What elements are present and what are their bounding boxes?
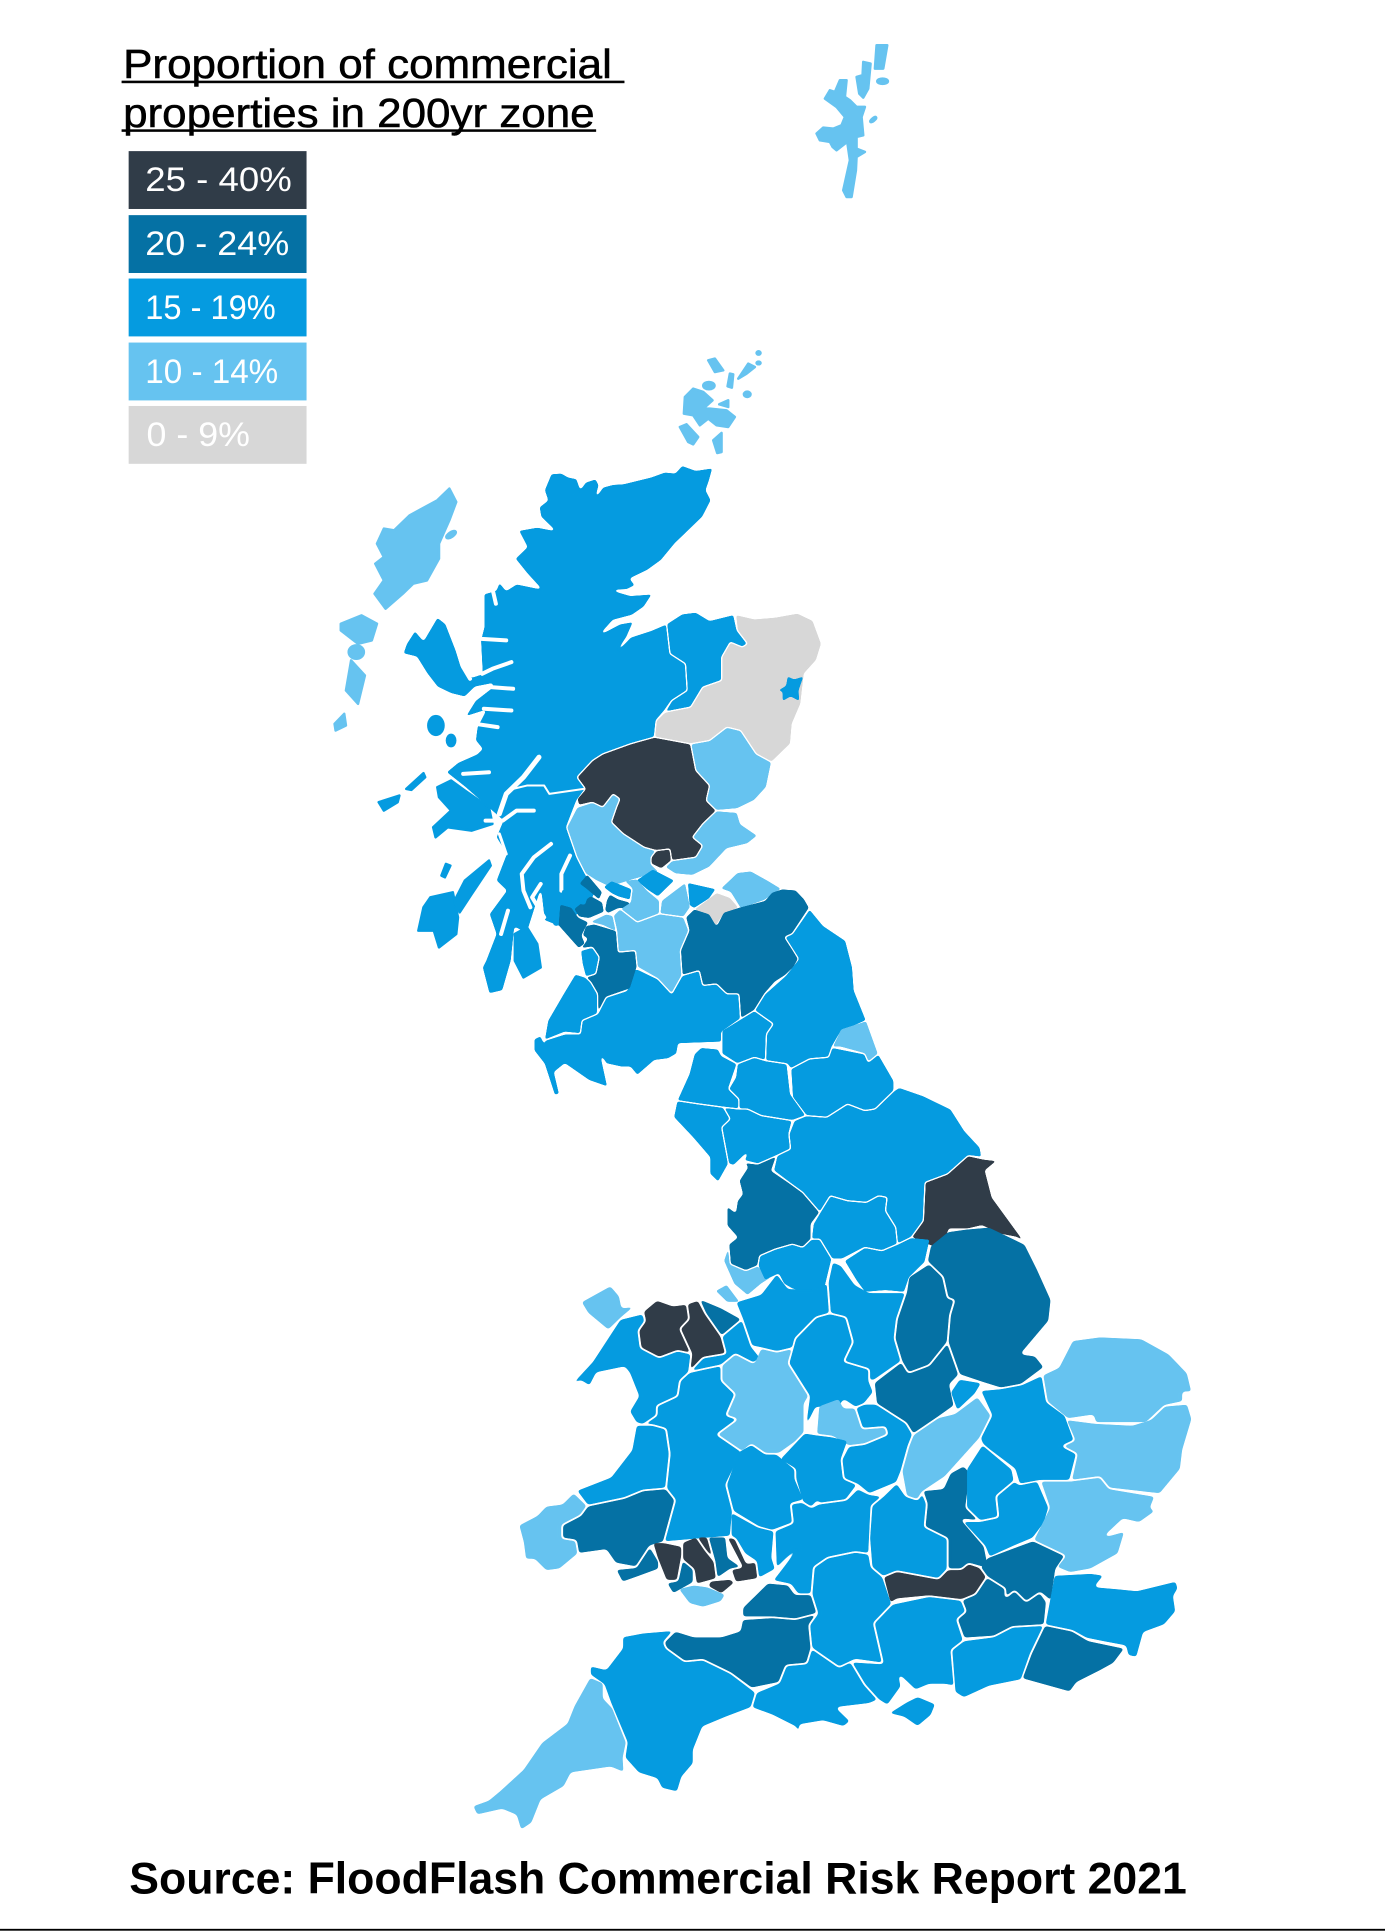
West Lothian	[660, 882, 691, 917]
West Yorkshire	[811, 1196, 897, 1259]
Conwy	[638, 1300, 691, 1358]
Wirral	[715, 1284, 741, 1302]
Angus	[691, 727, 772, 811]
Merseyside	[723, 1246, 772, 1296]
legend item: 10 - 14%	[129, 343, 307, 400]
Greater London	[980, 1540, 1065, 1602]
Suffolk	[1062, 1404, 1192, 1494]
West Dunbartonshire	[579, 874, 603, 900]
Renfrewshire	[573, 895, 604, 919]
Tyne and Wear	[832, 1021, 879, 1062]
Clackmannanshire	[651, 849, 672, 869]
Rhondda Cynon Taf	[682, 1537, 717, 1585]
Bristol and North Somerset	[742, 1583, 817, 1619]
Tynedale	[722, 1011, 773, 1064]
sea lochs	[463, 589, 584, 934]
Monmouthshire	[731, 1511, 776, 1579]
Midlothian	[694, 892, 739, 926]
Pembrokeshire	[518, 1492, 588, 1571]
County Durham	[791, 1047, 894, 1117]
Nottinghamshire	[895, 1263, 955, 1373]
Allerdale	[677, 1047, 739, 1109]
Derbyshire	[828, 1261, 906, 1381]
Isle of Wight	[888, 1696, 936, 1727]
Oxfordshire	[869, 1483, 948, 1579]
legend item: 0 - 9%	[129, 406, 307, 464]
Perth and Kinross	[577, 737, 717, 861]
Dorset	[751, 1648, 878, 1737]
Kent	[1045, 1573, 1178, 1658]
Bedfordshire	[966, 1444, 1015, 1521]
Newport	[726, 1537, 758, 1583]
East Ayrshire	[580, 924, 637, 1014]
Inverclyde	[561, 889, 589, 905]
Ceredigion	[576, 1425, 670, 1506]
Herefordshire	[726, 1444, 805, 1531]
Northamptonshire	[901, 1396, 992, 1500]
Falkirk	[635, 869, 675, 897]
Warwickshire	[841, 1404, 913, 1494]
choropleth map of Great Britain	[335, 45, 1192, 1831]
South Yorkshire	[844, 1237, 930, 1292]
South Lakeland	[722, 1107, 792, 1166]
Wrexham	[689, 1319, 761, 1372]
Rutland	[950, 1379, 982, 1411]
West Sussex	[951, 1625, 1045, 1698]
legend item: 15 - 19%: 15 - 19%	[145, 289, 276, 327]
Berkshire	[883, 1563, 987, 1604]
legend item: 25 - 40%	[129, 151, 307, 209]
East Lothian	[720, 871, 782, 909]
Aberdeen City	[777, 675, 804, 702]
Merthyr Tydfil	[696, 1537, 715, 1562]
legend item: 15 - 19%	[129, 279, 307, 336]
Outer Hebrides	[335, 489, 457, 730]
Shropshire	[717, 1348, 809, 1454]
Southern Scotland and Northern England	[534, 869, 1025, 1302]
legend item: 20 - 24%: 20 - 24%	[145, 225, 289, 263]
Denbighshire	[680, 1300, 726, 1372]
East Sussex	[1022, 1625, 1125, 1692]
Highland and Argyll region	[403, 465, 713, 994]
Worcestershire	[779, 1433, 858, 1508]
Lancashire	[727, 1156, 820, 1271]
Hertfordshire	[961, 1481, 1049, 1558]
Vale of Glamorgan	[678, 1585, 726, 1608]
Norfolk	[1042, 1336, 1192, 1423]
Wiltshire	[809, 1552, 892, 1667]
legend	[129, 151, 307, 464]
East Riding of Yorkshire	[911, 1156, 1025, 1249]
legend title: Proportion of commercial	[123, 41, 612, 87]
East Dunbartonshire	[603, 880, 632, 900]
Cornwall	[472, 1677, 627, 1831]
Powys	[643, 1365, 742, 1542]
Scottish Borders	[680, 889, 810, 1019]
Cambridgeshire	[980, 1375, 1077, 1485]
Aberdeenshire	[654, 613, 822, 762]
Northumberland	[754, 909, 866, 1069]
Greater Manchester	[758, 1239, 832, 1294]
Buckinghamshire	[922, 1465, 989, 1569]
Edinburgh	[687, 882, 717, 909]
South Ayrshire	[544, 974, 598, 1041]
Gloucestershire	[772, 1488, 883, 1594]
Hampshire	[851, 1596, 966, 1706]
Cheshire	[735, 1273, 830, 1352]
Anglesey	[581, 1285, 636, 1331]
Somerset	[664, 1613, 817, 1688]
Neath Port Talbot	[652, 1542, 682, 1581]
South Lanarkshire	[613, 909, 689, 994]
legend item: 20 - 24%	[129, 215, 307, 273]
Devon	[590, 1630, 756, 1792]
North Lanarkshire	[620, 879, 660, 922]
Lincolnshire	[927, 1227, 1052, 1388]
Stirling	[567, 794, 660, 887]
Leicestershire	[874, 1342, 959, 1435]
Swansea	[615, 1546, 659, 1583]
bottom border	[0, 1929, 1385, 1931]
Dumfries and Galloway	[534, 969, 741, 1096]
Copeland	[673, 1101, 730, 1182]
Moray	[665, 612, 748, 712]
legend title	[122, 41, 624, 136]
Staffordshire	[788, 1313, 874, 1431]
East Renfrewshire	[589, 914, 617, 932]
legend item: 10 - 14%: 10 - 14%	[145, 353, 278, 391]
legend item: 25 - 40%: 25 - 40%	[145, 161, 292, 199]
North Ayrshire	[558, 904, 589, 949]
legend item: 0 - 9%: 0 - 9%	[147, 416, 250, 454]
Essex	[1033, 1477, 1155, 1573]
North Yorkshire	[773, 1087, 982, 1244]
legend title: properties in 200yr zone	[123, 90, 595, 136]
Gwynedd	[569, 1313, 691, 1425]
Bridgend	[666, 1560, 694, 1594]
Shetland and Orkney islands	[680, 45, 888, 453]
Surrey	[957, 1577, 1047, 1638]
Scotland north and Hebrides	[335, 465, 822, 994]
Cardiff	[708, 1579, 735, 1594]
Glasgow	[604, 894, 630, 914]
Fife	[665, 811, 758, 876]
Caerphilly	[708, 1537, 742, 1579]
Wales, Midlands and Southern England	[472, 1227, 1192, 1831]
source line: Source: FloodFlash Commercial Risk Report 2021	[129, 1853, 1187, 1904]
Carmarthenshire	[562, 1488, 675, 1567]
Eden	[729, 1057, 806, 1121]
Flintshire	[698, 1298, 742, 1336]
West Midlands	[816, 1398, 888, 1446]
Inner Hebrides	[379, 716, 559, 977]
